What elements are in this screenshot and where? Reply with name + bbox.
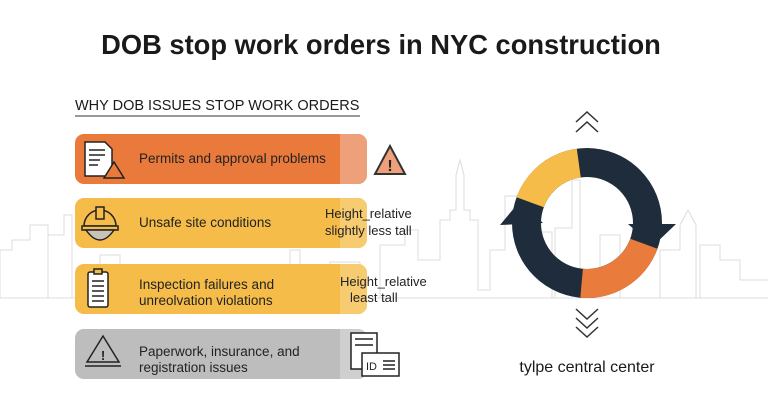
cycle diagram xyxy=(500,162,676,284)
chevrons down xyxy=(576,309,598,337)
note: slightly less tall: Height_relative xyxy=(325,206,412,221)
bar: unsafe xyxy=(75,198,412,248)
bar: paperwork: Paperwork, insurance, and xyxy=(139,344,300,359)
caption: tylpe central center xyxy=(519,359,655,376)
bar: paperwork: registration issues xyxy=(139,360,248,375)
bar: permits xyxy=(75,134,405,184)
bar: inspection xyxy=(75,264,427,314)
chevrons up xyxy=(576,112,598,132)
icon: warning triangle: ! xyxy=(387,158,393,175)
bar: permits: Permits and approval problems xyxy=(139,151,326,166)
bar: unsafe: slightly less tall xyxy=(325,223,412,238)
icon: warning triangle xyxy=(375,146,405,175)
bar: inspection: Inspection failures and xyxy=(139,277,274,292)
bar: paperwork xyxy=(75,329,399,379)
icon: warning sign: ! xyxy=(101,348,105,363)
section heading: WHY DOB ISSUES STOP WORK ORDERS xyxy=(75,98,359,114)
bar: inspection: unreolvation violations xyxy=(139,293,273,308)
icon: warning sign xyxy=(85,336,121,366)
icon: ID document: ID xyxy=(366,361,377,373)
title: DOB stop work orders in NYC construction xyxy=(101,29,661,60)
icon: clipboard xyxy=(88,269,108,307)
note: least tall: Height_relative xyxy=(340,274,427,289)
icon: document warning xyxy=(85,142,124,178)
bar: inspection: least tall xyxy=(350,290,398,305)
icon: hard hat xyxy=(82,207,118,240)
bar: unsafe: Unsafe site conditions xyxy=(139,215,271,230)
arrowhead right xyxy=(628,224,676,246)
skyline background xyxy=(0,160,768,298)
arrowhead left xyxy=(500,201,543,225)
icon: ID document xyxy=(351,333,399,376)
